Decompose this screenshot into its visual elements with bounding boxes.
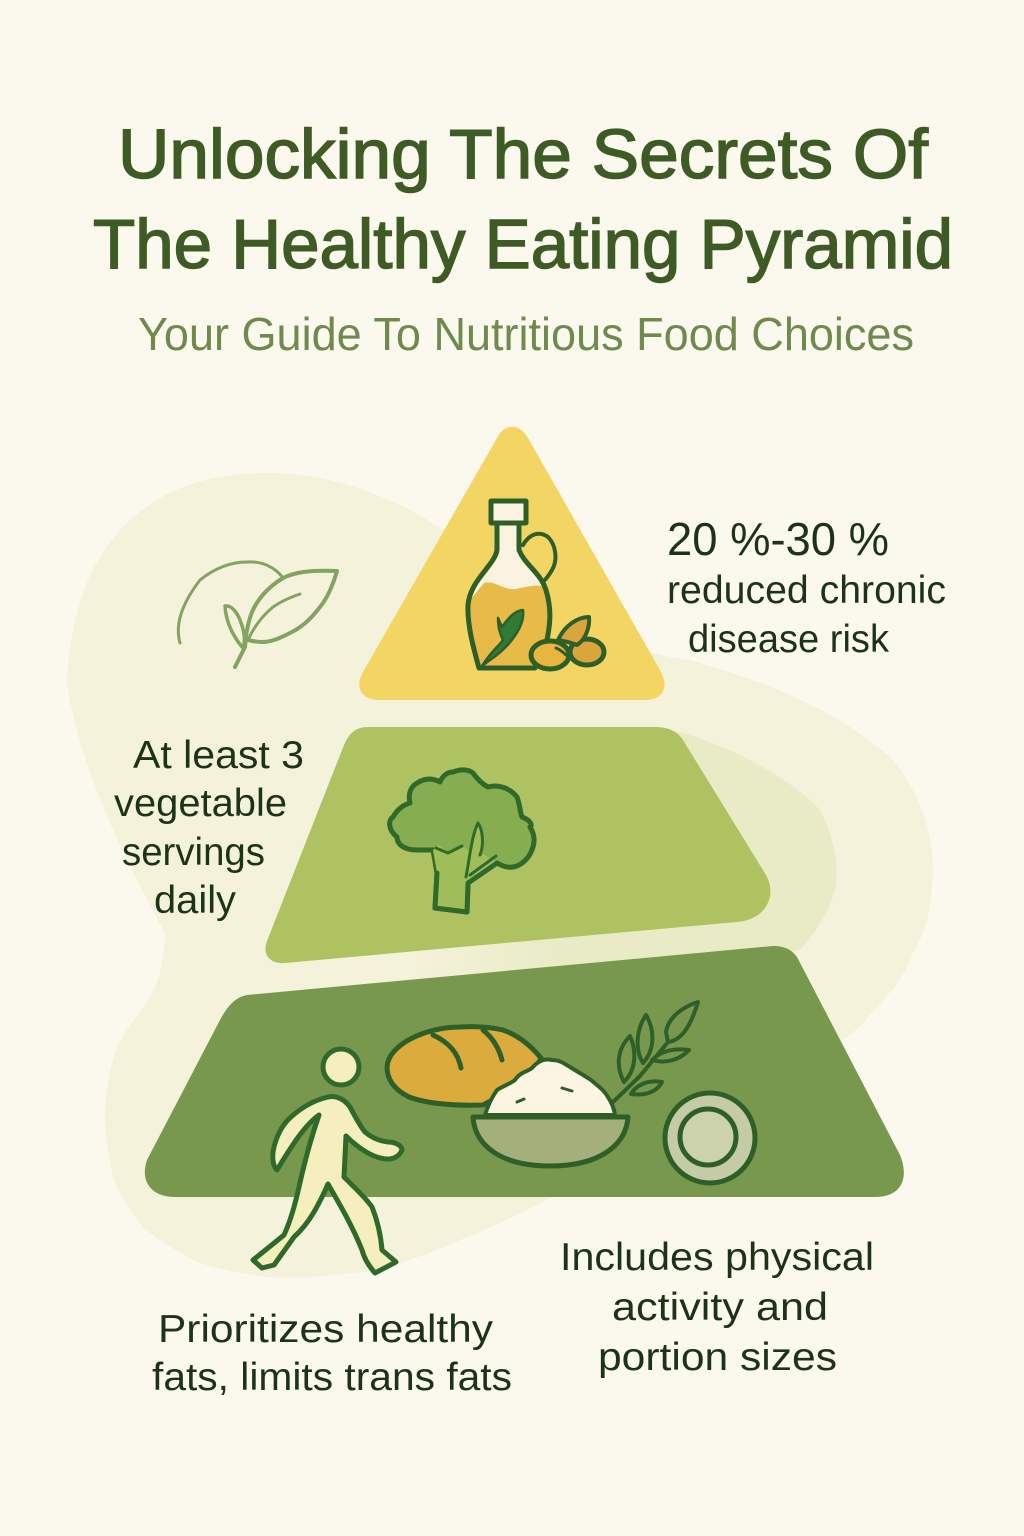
icon: herb sprig — [612, 1002, 698, 1103]
callout: vegetable servings: daily — [154, 879, 237, 922]
icon: rice bowl — [473, 1059, 628, 1166]
callout: vegetable servings — [114, 734, 304, 922]
pyramid tier: middle green — [266, 727, 770, 963]
callout: chronic disease risk: reduced chronic — [667, 569, 946, 612]
title: Unlocking The Secrets Of — [118, 115, 929, 193]
pyramid tier: bottom green — [145, 946, 904, 1197]
callout: physical activity: activity and — [612, 1286, 828, 1329]
band fade between tiers — [410, 930, 660, 975]
title: The Healthy Eating Pyramid — [93, 205, 953, 283]
callout: chronic disease risk — [667, 513, 946, 661]
pyramid tier: top yellow — [359, 427, 664, 700]
subtitle: Your Guide To Nutritious Food Choices — [138, 308, 914, 360]
icon: plate — [665, 1093, 755, 1183]
callout: chronic disease risk: disease risk — [688, 618, 889, 661]
icon: leaf outline — [178, 562, 337, 667]
icon: walking person — [253, 1049, 402, 1273]
callout: chronic disease risk: 20 %-30 % — [667, 513, 889, 565]
callout: vegetable servings: vegetable — [114, 782, 287, 825]
callout: healthy fats: Prioritizes healthy — [158, 1308, 494, 1351]
callout: physical activity — [560, 1236, 874, 1379]
callout: vegetable servings: At least 3 — [133, 734, 304, 777]
icon: oil bottle — [467, 501, 604, 669]
callout: physical activity: portion sizes — [598, 1336, 837, 1379]
title — [93, 115, 953, 283]
callout: vegetable servings: servings — [122, 831, 265, 874]
callout: healthy fats — [152, 1308, 512, 1399]
icon: broccoli — [390, 770, 534, 912]
callout: healthy fats: fats, limits trans fats — [152, 1356, 512, 1399]
icon: bread loaf — [387, 1027, 541, 1105]
background blob — [67, 473, 933, 1278]
callout: physical activity: Includes physical — [560, 1236, 874, 1279]
background band behind middle tier — [640, 727, 837, 975]
